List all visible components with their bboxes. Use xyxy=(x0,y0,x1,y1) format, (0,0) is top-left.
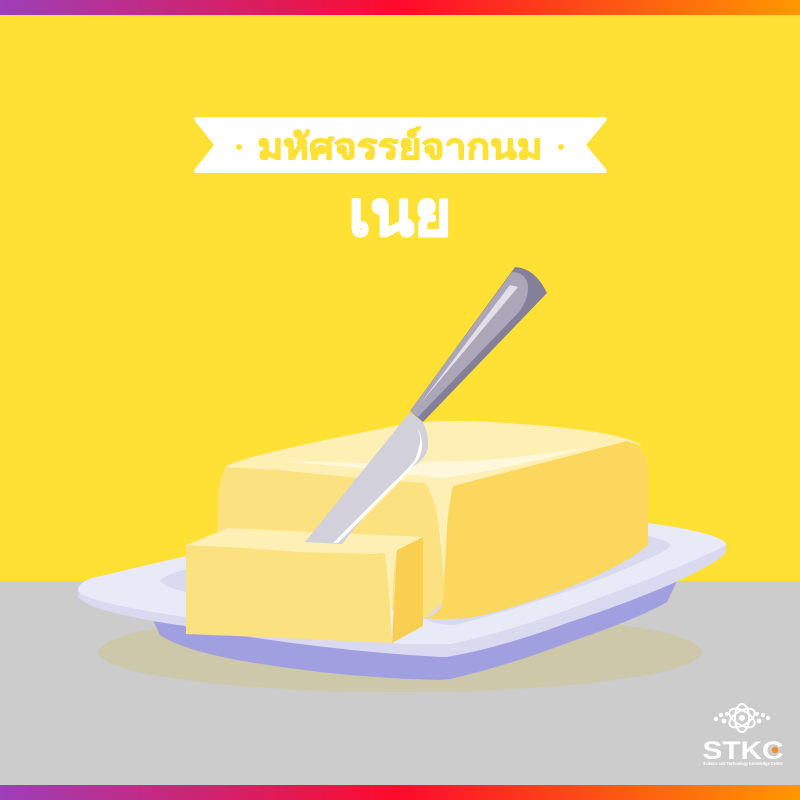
large butter block xyxy=(217,421,648,619)
small butter slice xyxy=(186,528,423,643)
main title: เนย xyxy=(348,180,452,249)
subtitle text: มหัศจรรย์จากนม xyxy=(258,126,542,167)
dish well xyxy=(160,500,670,625)
logo wordmark: STKC xyxy=(702,737,784,765)
left face xyxy=(217,465,455,618)
top face xyxy=(186,528,423,633)
blade xyxy=(305,412,428,544)
dish top xyxy=(78,523,726,644)
knife xyxy=(305,267,547,544)
top highlight xyxy=(280,447,590,478)
top gradient bar xyxy=(0,0,800,15)
right face xyxy=(424,441,648,619)
handle xyxy=(410,272,528,417)
butter dish xyxy=(78,500,726,680)
plate shadow xyxy=(98,612,702,692)
bottom gradient bar xyxy=(0,785,800,800)
dish rim edge xyxy=(78,543,726,657)
grey table surface xyxy=(0,581,800,800)
title ribbon xyxy=(194,117,607,173)
top surface and drip xyxy=(225,421,642,580)
dish base xyxy=(153,581,677,680)
logo orange dot xyxy=(772,747,778,753)
handle shadow xyxy=(410,267,547,422)
logo atom mark xyxy=(714,704,770,732)
logo tagline: Science and Technology Knowledge Center xyxy=(703,761,783,766)
blade edge shine xyxy=(333,428,422,543)
front face xyxy=(186,545,392,643)
yellow background xyxy=(0,0,800,581)
STKC logo xyxy=(702,704,784,766)
end face xyxy=(392,537,423,643)
handle shine xyxy=(420,285,518,404)
